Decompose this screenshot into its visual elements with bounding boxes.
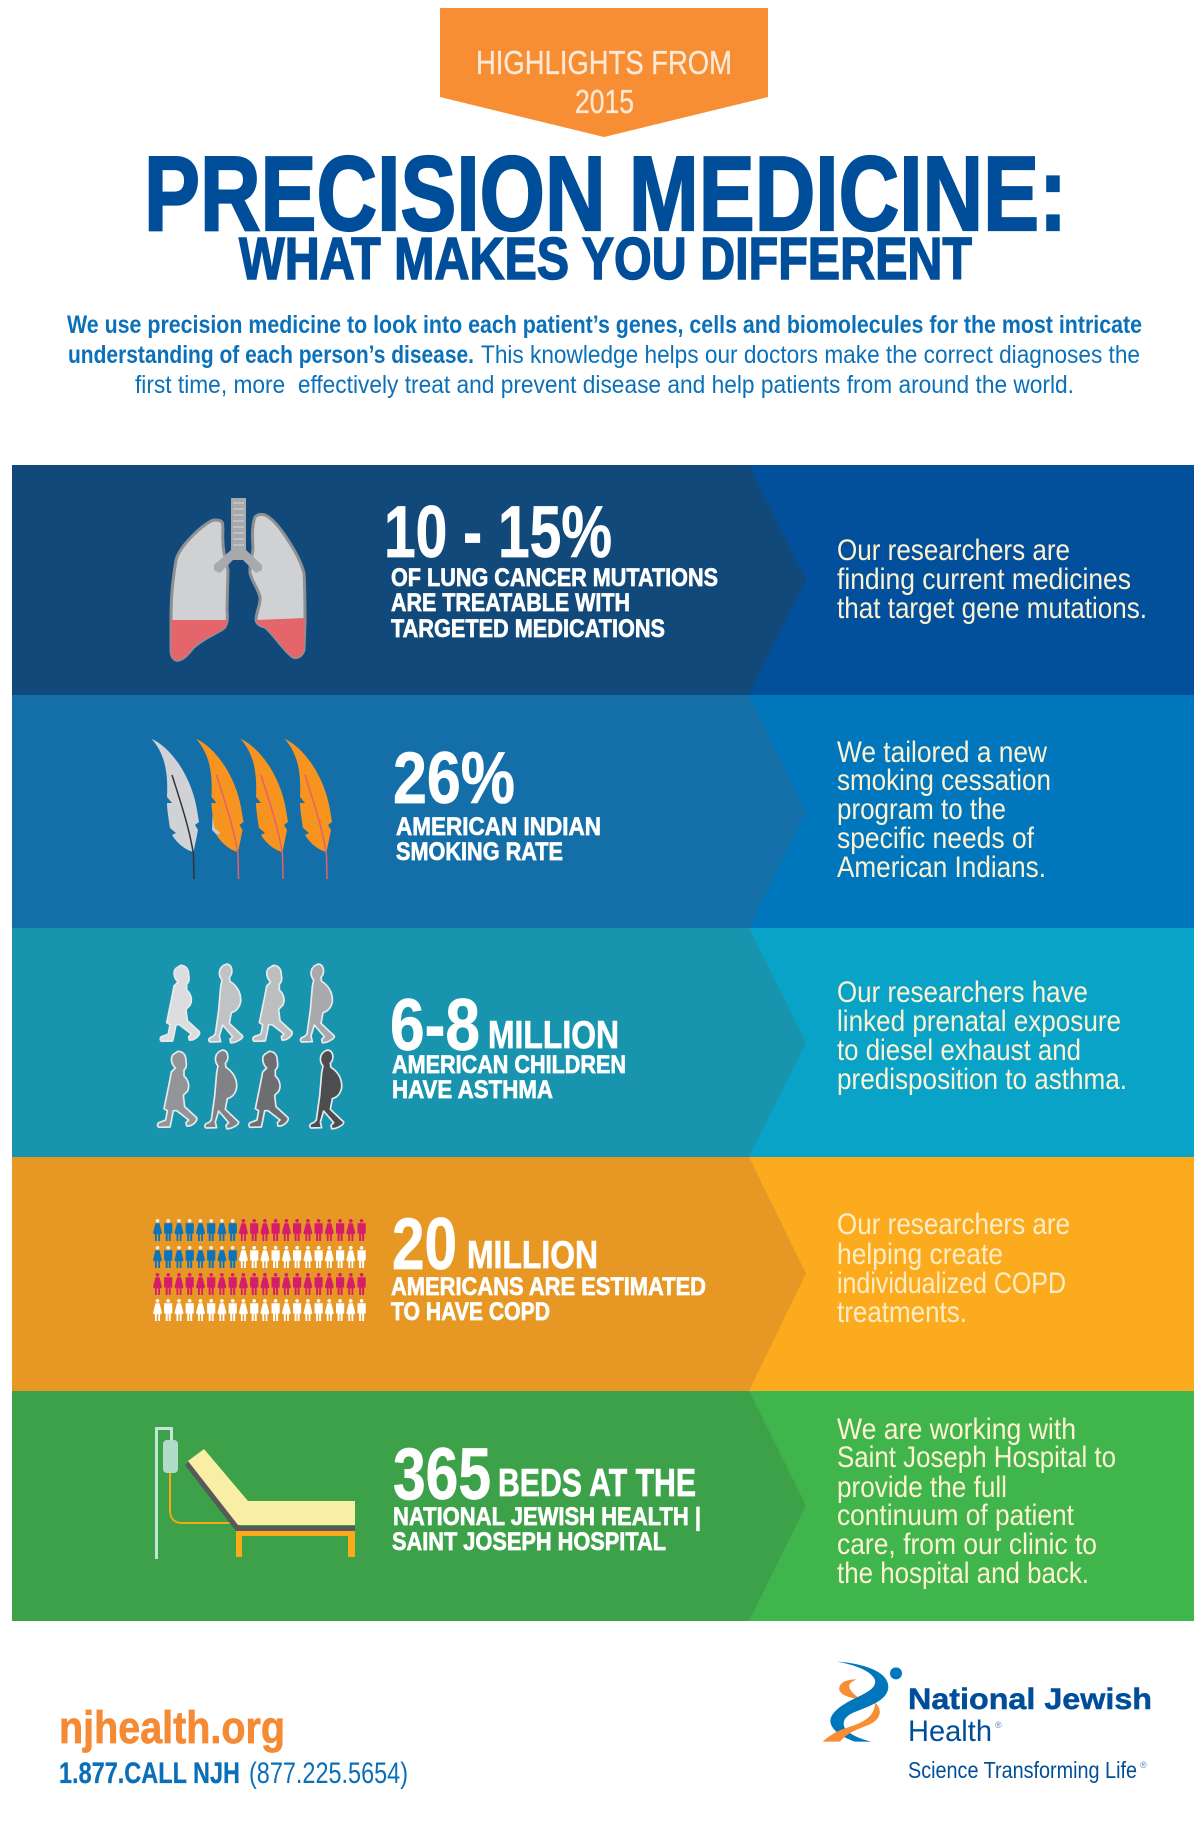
description: lung cancer: Our researchers are [837, 534, 1070, 567]
statistic: 6-8 million: HAVE ASTHMA [392, 1076, 553, 1104]
title [144, 135, 1067, 292]
statistic: 20 million: TO HAVE COPD [391, 1298, 550, 1326]
statistic: 6-8 million: AMERICAN CHILDREN [392, 1051, 626, 1079]
panel: smoking rate [12, 695, 1194, 928]
statistic: 365 beds [392, 1434, 701, 1556]
description: smoking cessation: American Indians. [837, 851, 1046, 884]
logo: National Jewish Health: ® [995, 1720, 1002, 1730]
footer contact: njhealth.org [59, 1702, 285, 1753]
statistic: 26% [393, 738, 601, 866]
description: smoking cessation: program to the [837, 793, 1006, 826]
panel: asthma [12, 928, 1194, 1157]
intro paragraph [67, 311, 1142, 399]
description: COPD [837, 1208, 1070, 1329]
description: continuum of care: care, from our clinic to [837, 1528, 1097, 1561]
statistic: 26%: SMOKING RATE [396, 838, 563, 866]
statistic: 6-8 million [390, 985, 626, 1104]
banner: highlights from 2015 [440, 8, 768, 137]
description: continuum of care: We are working with [837, 1413, 1076, 1446]
icon: helix mark [823, 1662, 902, 1742]
description: continuum of care: provide the full [837, 1471, 1007, 1504]
statistic: 10-15% [384, 492, 718, 643]
description: asthma: to diesel exhaust and [837, 1034, 1081, 1067]
icon: people pictogram [153, 1219, 366, 1321]
logo: National Jewish Health: Health [908, 1715, 992, 1748]
logo: National Jewish Health: Science Transforming Life [908, 1757, 1137, 1783]
statistic: 365 beds: SAINT JOSEPH HOSPITAL [392, 1528, 666, 1556]
description: continuum of care: continuum of patient [837, 1499, 1075, 1532]
footer contact [59, 1702, 408, 1790]
description: COPD: treatments. [837, 1296, 967, 1329]
statistic: 10-15%: OF LUNG CANCER MUTATIONS [391, 564, 718, 592]
statistic: 10-15%: ARE TREATABLE WITH [391, 589, 630, 617]
icon: lungs [171, 498, 305, 660]
description: COPD: individualized COPD [837, 1267, 1066, 1300]
logo: National Jewish Health: ® [1140, 1760, 1147, 1770]
description: COPD: Our researchers are [837, 1208, 1070, 1241]
intro paragraph: first time, more effectively treat and prevent disease and help patients from around the world. [135, 371, 1074, 399]
description: continuum of care: the hospital and back. [837, 1557, 1089, 1590]
statistic: 20 million: 20 [392, 1204, 457, 1285]
statistic: 6-8 million: 6-8 [390, 985, 480, 1066]
icon: hospital bed and IV [155, 1427, 355, 1559]
description: smoking cessation [837, 736, 1051, 884]
statistic: 20 million [391, 1204, 706, 1326]
description: COPD: helping create [837, 1238, 1003, 1271]
footer contact: 1.877.CALL NJH [59, 1757, 240, 1790]
statistic: 26%: AMERICAN INDIAN [396, 813, 601, 841]
intro paragraph: This knowledge helps our doctors make the correct diagnoses the [481, 341, 1140, 369]
statistic: 20 million: MILLION [467, 1234, 598, 1277]
icon: walking children [158, 964, 344, 1129]
panel: lung cancer [12, 465, 1194, 695]
statistic: 365 beds: NATIONAL JEWISH HEALTH | [393, 1503, 701, 1531]
description: continuum of care: Saint Joseph Hospital to [837, 1441, 1116, 1474]
description: continuum of care [837, 1413, 1116, 1590]
icon: feathers [152, 739, 332, 879]
description: smoking cessation: specific needs of [837, 822, 1035, 855]
statistic: 365 beds: 365 [393, 1434, 491, 1515]
description: lung cancer: finding current medicines [837, 563, 1131, 596]
description: asthma: Our researchers have [837, 976, 1088, 1009]
description: smoking cessation: We tailored a new [837, 736, 1047, 769]
intro paragraph: understanding of each person’s disease. [68, 341, 474, 369]
description: smoking cessation: smoking cessation [837, 764, 1051, 797]
statistic: 10-15%: 10 - 15% [384, 492, 612, 573]
banner: highlights from 2015: HIGHLIGHTS FROM [476, 44, 732, 81]
panel: COPD [12, 1157, 1194, 1391]
logo: National Jewish Health: National Jewish [908, 1683, 1152, 1716]
logo: National Jewish Health [823, 1662, 1152, 1783]
description: asthma: predisposition to asthma. [837, 1063, 1127, 1096]
statistic: 26%: 26% [393, 738, 515, 819]
description: asthma: linked prenatal exposure [837, 1005, 1121, 1038]
panel: hospital beds [12, 1391, 1194, 1621]
banner: highlights from 2015: 2015 [575, 83, 634, 120]
description: lung cancer [837, 534, 1147, 625]
statistic: 10-15%: TARGETED MEDICATIONS [391, 615, 665, 643]
statistic: 6-8 million: MILLION [488, 1014, 619, 1057]
description: asthma [837, 976, 1127, 1096]
statistic: 20 million: AMERICANS ARE ESTIMATED [391, 1273, 706, 1301]
title: WHAT MAKES YOU DIFFERENT [239, 226, 972, 292]
description: lung cancer: that target gene mutations. [837, 592, 1147, 625]
footer contact: (877.225.5654) [249, 1757, 408, 1790]
statistic: 365 beds: BEDS AT THE [498, 1462, 696, 1505]
